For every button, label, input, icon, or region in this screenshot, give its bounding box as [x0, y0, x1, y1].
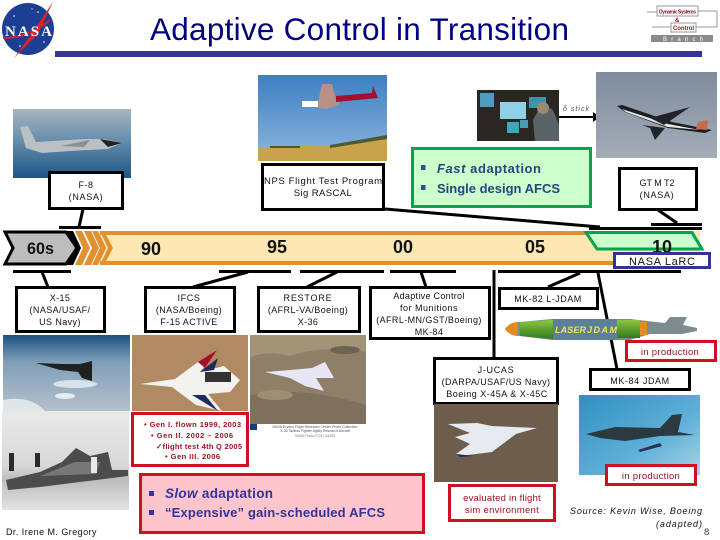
- icon: Dynamic Systems and Control Branch logo: [647, 6, 717, 43]
- status: MK-82 in production: [626, 342, 716, 360]
- photo: X-36 RESTORE: NASA Dryden Flight Research Center Photo Collection: [272, 425, 358, 429]
- icon: NASA logo: [2, 2, 54, 58]
- callout: fast adaptation: Single design AFCS: [437, 181, 560, 196]
- current period marker: [586, 232, 702, 249]
- icon: NASA logo: NASA: [5, 24, 52, 40]
- timeline year: 60s: 60s: [27, 239, 54, 258]
- label box: J-UCAS: (DARPA/USAF/US Navy): [442, 377, 550, 387]
- photo: X-36 RESTORE: NASA Photo EC97-44295: [295, 434, 335, 438]
- label box: F-8: F-8: [78, 180, 94, 190]
- status: evaluated in flight sim: [450, 486, 554, 520]
- photo: NPS RASCAL aircraft: [258, 75, 387, 161]
- photo: X-15 crash site: [2, 411, 129, 510]
- callout: slow adaptation: Slow adaptation: [165, 486, 273, 501]
- label box: F-8: (NASA): [69, 192, 103, 202]
- timeline year: 90: 90: [141, 239, 161, 259]
- photo: laser JDAM bomb: JDAM: [587, 325, 618, 335]
- photo: simulator pilot: [477, 90, 559, 141]
- label box: RESTORE: (AFRL-VA/Boeing): [268, 305, 348, 315]
- photo: F-15 ACTIVE: [132, 335, 248, 411]
- label box: MK-82 L-JDAM: [500, 288, 598, 308]
- timeline year: 00: 00: [393, 237, 413, 257]
- label box: NPS Flight Test Program: Sig RASCAL: [294, 188, 352, 199]
- icon: Dynamic Systems and Control Branch logo: &: [675, 18, 680, 24]
- callout: IFCS generations: • Gen II. 2002 – 2006: [151, 431, 233, 440]
- callout: fast adaptation: Fast adaptation: [437, 161, 541, 176]
- label box: MK-84 JDAM: MK-84 JDAM: [610, 376, 670, 386]
- photo: F/A-18 with MK-84: [579, 395, 700, 475]
- label box: X-15: US Navy): [39, 317, 81, 327]
- label box: J-UCAS: Boeing X-45A & X-45C: [446, 389, 548, 399]
- photo: X-36 RESTORE: [250, 335, 366, 438]
- photo: laser JDAM bomb: LASER: [555, 325, 586, 335]
- timeline lower bars: [13, 270, 681, 369]
- label box: J-UCAS: [434, 358, 558, 404]
- label box: NPS Flight Test Program: NPS Flight Test Program: [264, 176, 382, 187]
- photo: X-15 in flight: [3, 335, 130, 411]
- callout: fast adaptation: [412, 148, 590, 206]
- photo: GTM T2 airliner: [596, 72, 717, 158]
- photo: F-8 aircraft: [13, 109, 131, 178]
- label box: GTM T2: GT M T2: [640, 178, 674, 188]
- label box: IFCS: (NASA/Boeing): [156, 305, 222, 315]
- label box: RESTORE: [258, 288, 360, 332]
- arrow: simulator to GTM: [559, 106, 600, 122]
- label box: IFCS: IFCS: [178, 293, 200, 303]
- label box: X-15: X-15: [50, 293, 70, 303]
- title: Adaptive Control in Transition: [150, 11, 569, 47]
- status: MK-84 in production: [606, 466, 696, 484]
- label box: Adaptive Control for Munitions: MK-84: [415, 327, 443, 337]
- label box: IFCS: [146, 288, 234, 332]
- icon: Dynamic Systems and Control Branch logo: Control: [673, 26, 694, 32]
- label box: X-15: (NASA/USAF/: [30, 305, 91, 315]
- timeline year: 95: 95: [267, 237, 287, 257]
- photo: laser JDAM bomb: [505, 317, 697, 340]
- callout: IFCS generations: ✓flight test 4th Q 2005: [156, 442, 242, 451]
- page number: 8: [704, 527, 709, 538]
- label box: Adaptive Control for Munitions: for Munitions: [400, 303, 458, 313]
- callout: IFCS generations: • Gen I. flown 1999, 2003: [144, 420, 241, 429]
- callout: IFCS generations: • Gen III. 2006: [165, 452, 220, 461]
- status: MK-82 in production: in production: [641, 347, 699, 358]
- label box: GTM T2: (NASA): [640, 190, 674, 200]
- label: NASA LaRC: [614, 254, 710, 268]
- label box: NPS Flight Test Program: [262, 164, 600, 227]
- label box: IFCS: F-15 ACTIVE: [160, 317, 218, 327]
- timeline year: 05: 05: [525, 237, 545, 257]
- label box: F-8: [50, 172, 122, 229]
- label box: J-UCAS: J-UCAS: [478, 365, 514, 375]
- label box: X-15: [16, 288, 104, 332]
- timeline: [5, 231, 700, 265]
- icon: Dynamic Systems and Control Branch logo: Branch: [663, 37, 703, 43]
- callout: IFCS generations: [132, 414, 248, 466]
- status: MK-84 in production: in production: [622, 471, 680, 482]
- callout: slow adaptation: “Expensive” gain-scheduled AFCS: [165, 505, 385, 520]
- label box: MK-84 JDAM: [590, 370, 690, 390]
- author credit: Dr. Irene M. Gregory: [6, 527, 97, 537]
- photo: X-36 RESTORE: X-36 Tailless Fighter Agility Research Aircraft: [280, 429, 350, 433]
- label: NASA LaRC: NASA LaRC: [629, 256, 695, 268]
- timeline year: 10: 10: [652, 237, 672, 257]
- label box: RESTORE: X-36: [298, 317, 318, 327]
- status: evaluated in flight sim: sim environment: [465, 505, 539, 516]
- arrow: simulator to GTM: δ stick: [563, 106, 590, 113]
- label box: Adaptive Control for Munitions: (AFRL-MN/GST/Boeing): [376, 315, 482, 325]
- photo: X-45: [434, 404, 558, 482]
- label box: Adaptive Control for Munitions: [370, 288, 490, 338]
- callout: slow adaptation: [140, 474, 424, 532]
- source note: Source: Kevin Wise, Boeing: [570, 506, 702, 516]
- source note: (adapted): [656, 519, 702, 529]
- icon: Dynamic Systems and Control Branch logo: Dynamic Systems: [659, 10, 696, 16]
- label box: Adaptive Control for Munitions: Adaptive Control: [393, 291, 465, 301]
- label box: RESTORE: RESTORE: [284, 293, 332, 303]
- status: evaluated in flight sim: evaluated in flight: [463, 493, 541, 504]
- source note: [570, 506, 702, 529]
- label box: MK-82 L-JDAM: MK-82 L-JDAM: [514, 294, 582, 304]
- label box: GTM T2: [589, 168, 702, 230]
